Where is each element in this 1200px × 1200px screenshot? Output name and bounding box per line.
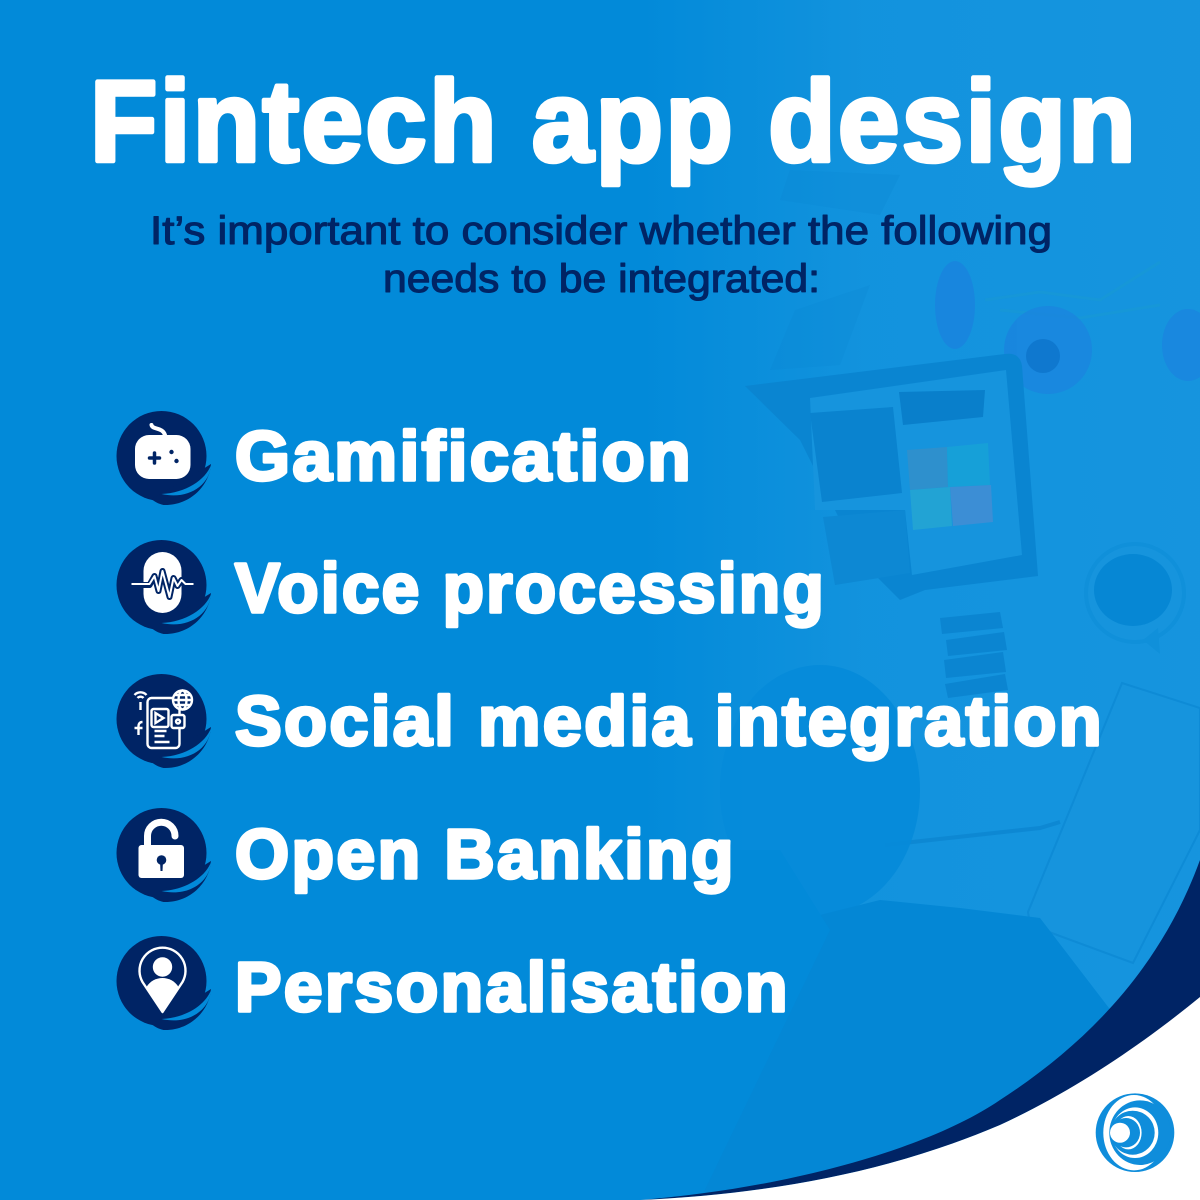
- label: Open Banking: [235, 815, 736, 893]
- photo: poster on desk: [770, 170, 900, 370]
- photo: screen banner: [899, 390, 985, 425]
- subtitle: needs to be integrated:: [383, 257, 820, 301]
- photo: lower left fade: [640, 850, 830, 1200]
- photo: laptop screen: [810, 370, 1022, 575]
- photo: person shoulders and body: [640, 900, 1112, 1200]
- list item: Personalisation: [116, 936, 790, 1030]
- photo: notebook edge: [885, 822, 1060, 845]
- white corner: [640, 997, 1200, 1200]
- photo: tablet in hand: [1028, 683, 1200, 963]
- icon: open padlock: [116, 808, 211, 902]
- label: Social media integration: [235, 682, 1104, 760]
- subtitle: It’s important to consider whether the following: [150, 209, 1052, 253]
- label: Voice processing: [235, 549, 826, 627]
- list item: Open Banking: [116, 808, 736, 902]
- list item: Social media integration: [116, 674, 1104, 768]
- photo: laptop frame: [745, 354, 1038, 600]
- photo: flowers: [935, 261, 1200, 394]
- photo: person head: [720, 665, 920, 915]
- icon: location pin person: [116, 936, 211, 1030]
- photo: flower centre: [1026, 339, 1060, 373]
- label: Personalisation: [235, 948, 790, 1026]
- icon: game controller: [116, 411, 211, 505]
- icon: social media phone: [116, 674, 211, 768]
- list item: Gamification: [116, 411, 693, 505]
- navy curved band: [640, 860, 1200, 1200]
- list item: Voice processing: [116, 540, 826, 634]
- photo: screen tiles: [907, 443, 993, 530]
- photo: screen lower card: [823, 510, 910, 585]
- logo: [1096, 1093, 1174, 1172]
- label: Gamification: [235, 417, 693, 495]
- icon: voice wave: [116, 540, 211, 634]
- subtitle: [150, 209, 1052, 301]
- title: Fintech app design: [90, 58, 1138, 186]
- photo: keyboard: [940, 612, 1008, 698]
- faded desk photo: [640, 0, 1200, 1200]
- photo: coffee cup: [1086, 544, 1184, 654]
- photo: flower stems: [985, 262, 1160, 318]
- photo: screen dark card: [810, 407, 902, 502]
